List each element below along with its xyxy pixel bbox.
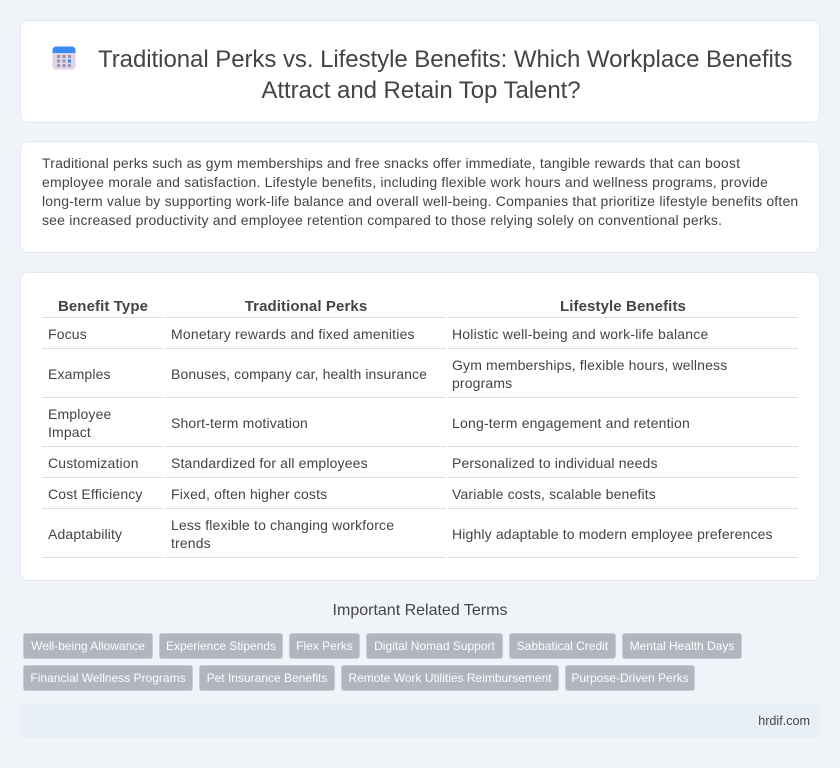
row: adaptability [42,517,798,558]
row: examples: Examples [48,366,111,382]
related terms tags [23,633,742,691]
comparison table card [20,272,820,581]
row: employee impact [42,406,798,447]
row: employee impact: Impact [48,424,91,440]
intro paragraph [42,155,798,228]
heading: Attract and Retain Top Talent? [261,77,581,104]
title card [20,20,820,123]
table header: Lifestyle Benefits [560,298,686,315]
row: customization: Standardized for all employees [171,455,368,471]
tag [565,665,695,691]
row: customization: Personalized to individual needs [452,455,658,471]
footer source: hrdif.com [758,714,810,728]
row: employee impact: Short-term motivation [171,415,308,431]
row: examples: programs [452,375,512,391]
row: employee impact: Long-term engagement and retention [452,415,690,431]
row: employee impact: Employee [48,406,111,422]
icon: calendar [52,46,76,70]
intro paragraph: employee morale and satisfaction. Lifestyle benefits, including flexible work hours and wellness programs, provide [42,174,768,190]
related terms heading: Important Related Terms [333,602,507,619]
tag: Flex Perks [296,639,353,653]
table header: Benefit Type [58,298,148,315]
tag: Purpose-Driven Perks [571,671,689,685]
tag: Experience Stipends [166,639,276,653]
row: adaptability: Adaptability [48,526,122,542]
intro paragraph: Traditional perks such as gym memberships and free snacks offer immediate, tangible rewards that can boost [42,155,740,171]
row: focus: Monetary rewards and fixed amenities [171,326,415,342]
row: cost efficiency: Variable costs, scalable benefits [452,486,656,502]
tag [289,633,360,659]
tag [23,633,153,659]
tag [341,665,559,691]
tag [509,633,616,659]
row: focus: Focus [48,326,87,342]
table header [42,298,798,318]
tag [159,633,283,659]
tag: Financial Wellness Programs [30,671,186,685]
row: customization [42,455,798,478]
row: examples: Gym memberships, flexible hours, wellness [452,357,727,373]
row: adaptability: Highly adaptable to modern employee preferences [452,526,773,542]
row: focus [42,326,798,349]
table header: Traditional Perks [245,298,367,315]
row: adaptability: trends [171,535,211,551]
row: cost efficiency [42,486,798,509]
row: cost efficiency: Fixed, often higher costs [171,486,327,502]
tag [622,633,742,659]
tag [23,665,193,691]
tag: Mental Health Days [630,639,734,653]
tag: Sabbatical Credit [517,639,608,653]
heading: Traditional Perks vs. Lifestyle Benefits: Which Workplace Benefits [98,46,792,73]
tag [199,665,335,691]
row: cost efficiency: Cost Efficiency [48,486,143,502]
row: adaptability: Less flexible to changing workforce [171,517,394,533]
footer bar [20,704,820,738]
tag: Pet Insurance Benefits [207,671,327,685]
intro text card [20,141,820,253]
row: focus: Holistic well-being and work-life balance [452,326,708,342]
tag: Remote Work Utilities Reimbursement [348,671,552,685]
intro paragraph: see increased productivity and employee retention compared to those relying solely on conventional perks. [42,212,722,228]
tag: Digital Nomad Support [374,639,495,653]
tag: Well-being Allowance [31,639,145,653]
row: examples [42,357,798,398]
intro paragraph: long-term value by supporting work-life balance and overall well-being. Companies that prioritize lifestyle benefits often [42,193,798,209]
row: customization: Customization [48,455,139,471]
tag [366,633,503,659]
row: examples: Bonuses, company car, health insurance [171,366,427,382]
heading [98,46,792,104]
